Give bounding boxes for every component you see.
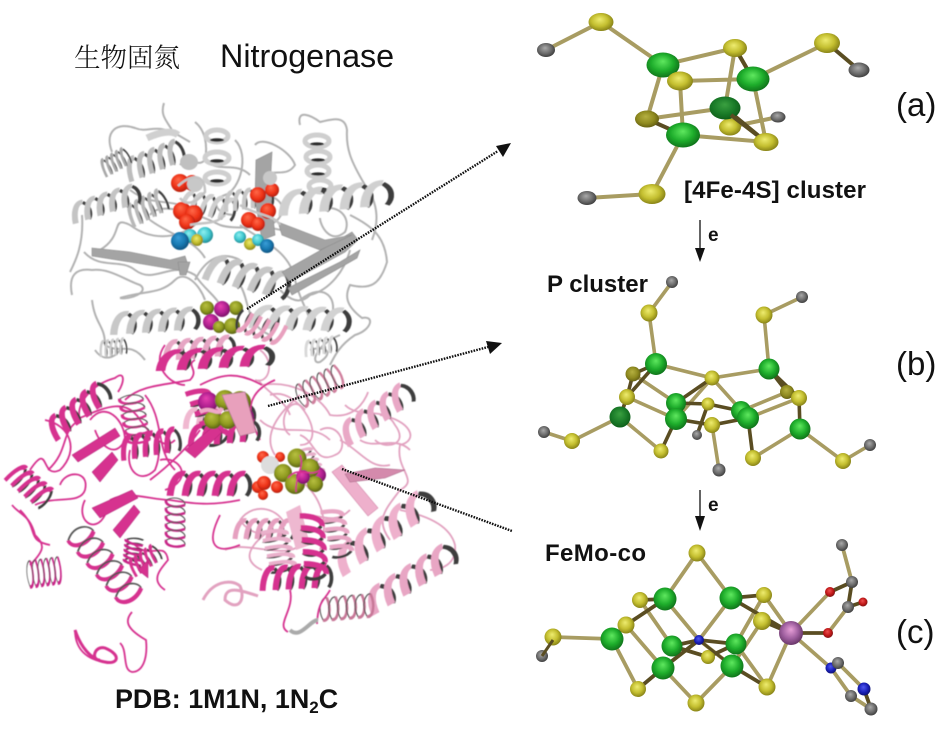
grey Fe protein ribbons xyxy=(70,103,392,365)
electron arrow a to b: e xyxy=(708,225,719,246)
pink MoFe protein, magenta chain xyxy=(5,345,332,672)
[4Fe-4S] cluster spheres xyxy=(200,301,243,334)
panel label (a): (a) xyxy=(896,86,936,123)
cluster (c): FeMo cofactor model xyxy=(536,539,878,716)
electron arrow b to c xyxy=(695,490,719,531)
protein structure: nitrogenase ribbon model xyxy=(5,103,460,672)
panel label (c): (c) xyxy=(896,613,934,650)
title: Nitrogenase xyxy=(220,38,394,74)
central MoFe spheres: P cluster xyxy=(198,390,256,436)
FeMo-co spheres with homocitrate xyxy=(252,448,326,500)
PDB caption: 2 xyxy=(309,698,319,717)
end-on helix stacks xyxy=(205,130,331,192)
label: FeMo-co: FeMo-co xyxy=(545,540,646,567)
label: P cluster: P cluster xyxy=(547,271,648,298)
dotted line to FeMo-co xyxy=(342,469,512,531)
pink MoFe protein, light chain xyxy=(164,309,460,621)
title xyxy=(74,36,394,75)
panel label (b): (b) xyxy=(896,345,936,382)
PDB caption: PDB: 1M1N, 1N xyxy=(115,684,309,714)
label: [4Fe-4S] cluster: [4Fe-4S] cluster xyxy=(684,177,866,204)
cluster (b): P cluster model xyxy=(538,276,876,476)
beta sheets grey xyxy=(92,152,360,295)
dotted arrow to P cluster xyxy=(268,341,502,406)
cluster (a): 4Fe-4S model xyxy=(537,13,870,205)
electron arrow b to c: e xyxy=(708,495,719,516)
dotted arrow to [4Fe-4S] cluster xyxy=(247,143,511,309)
PDB caption: C xyxy=(319,684,338,714)
title: 生物固氮 xyxy=(74,36,180,75)
grey protein ligands: ATP spheres xyxy=(171,154,279,253)
electron arrow a to b xyxy=(695,220,719,262)
